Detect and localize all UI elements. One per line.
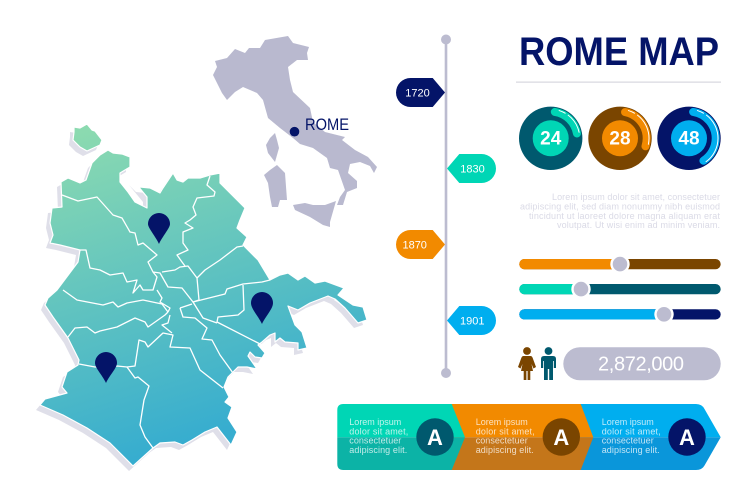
step 3 blue: dolor sit amet, bbox=[602, 426, 661, 436]
map land bbox=[40, 124, 367, 466]
step 2 orange: dolor sit amet, bbox=[476, 426, 535, 436]
slider orange bbox=[519, 254, 721, 274]
icon: woman bbox=[518, 347, 536, 380]
map pin 1 bbox=[148, 213, 170, 244]
tag 1870 bbox=[396, 230, 445, 259]
donut 28 bbox=[588, 107, 652, 170]
Rome marker bbox=[290, 127, 299, 136]
map: Rome districts bbox=[36, 124, 367, 471]
step 2 orange: A bbox=[553, 425, 569, 450]
lorem paragraph: Lorem ipsum dolor sit amet, consectetuer bbox=[552, 192, 720, 202]
Rome label: ROME bbox=[305, 116, 349, 134]
tag 1901: 1901 bbox=[460, 315, 485, 327]
title rule bbox=[516, 82, 721, 83]
lorem paragraph bbox=[520, 192, 720, 230]
slider teal bbox=[519, 279, 721, 299]
step 3 blue: A bbox=[679, 425, 695, 450]
Sardinia bbox=[264, 165, 287, 207]
icon: man bbox=[541, 347, 556, 380]
step 1 teal bbox=[337, 404, 465, 470]
step 1 teal: A bbox=[427, 425, 443, 450]
step 2 orange: Lorem ipsum bbox=[476, 417, 528, 427]
donut 24 bbox=[519, 107, 582, 170]
title: ROME MAP bbox=[519, 30, 719, 74]
Italy mainland bbox=[213, 36, 377, 205]
donut 24: 24 bbox=[540, 129, 562, 150]
step 1 teal: dolor sit amet, bbox=[349, 426, 408, 436]
step 3 blue bbox=[570, 404, 721, 470]
map shadow bbox=[36, 129, 363, 471]
step 1 teal: adipiscing elit. bbox=[349, 445, 407, 455]
tag 1830 bbox=[447, 154, 496, 183]
map pin 2 bbox=[251, 292, 273, 324]
population pill bbox=[563, 347, 721, 380]
donut 48 bbox=[657, 107, 721, 170]
map: Italy bbox=[213, 36, 377, 227]
tag 1720 bbox=[396, 78, 445, 107]
Sicily bbox=[293, 201, 336, 227]
district borders bbox=[62, 176, 270, 448]
step 2 orange: adipiscing elit. bbox=[476, 445, 534, 455]
tag 1830: 1830 bbox=[460, 163, 485, 175]
timeline axis bbox=[441, 34, 451, 378]
timeline bbox=[396, 34, 496, 378]
Corsica bbox=[266, 133, 279, 162]
step 3 blue: Lorem ipsum bbox=[602, 417, 654, 427]
lorem paragraph: adipiscing elit, sed diam nonummy nibh euismod bbox=[520, 201, 720, 211]
slider blue bbox=[519, 305, 721, 324]
step 1 teal: Lorem ipsum bbox=[349, 417, 401, 427]
step 3 blue: adipiscing elit. bbox=[602, 445, 660, 455]
donut 28: 28 bbox=[609, 129, 631, 150]
tag 1901 bbox=[447, 306, 496, 335]
banner: three step arrow bbox=[337, 404, 721, 470]
map pin 3 bbox=[95, 352, 117, 383]
step 2 orange: consectetuer bbox=[476, 436, 528, 446]
step 2 orange bbox=[445, 404, 593, 470]
donut 48: 48 bbox=[678, 129, 700, 150]
step 1 teal: consectetuer bbox=[349, 436, 401, 446]
step 3 blue: consectetuer bbox=[602, 436, 654, 446]
tag 1870: 1870 bbox=[402, 240, 427, 252]
lorem paragraph: volutpat. Ut wisi enim ad minim veniam. bbox=[557, 220, 720, 230]
tag 1720: 1720 bbox=[405, 88, 430, 100]
population pill: 2,872,000 bbox=[598, 354, 684, 376]
lorem paragraph: tincidunt ut laoreet dolore magna aliquam erat bbox=[529, 211, 720, 221]
